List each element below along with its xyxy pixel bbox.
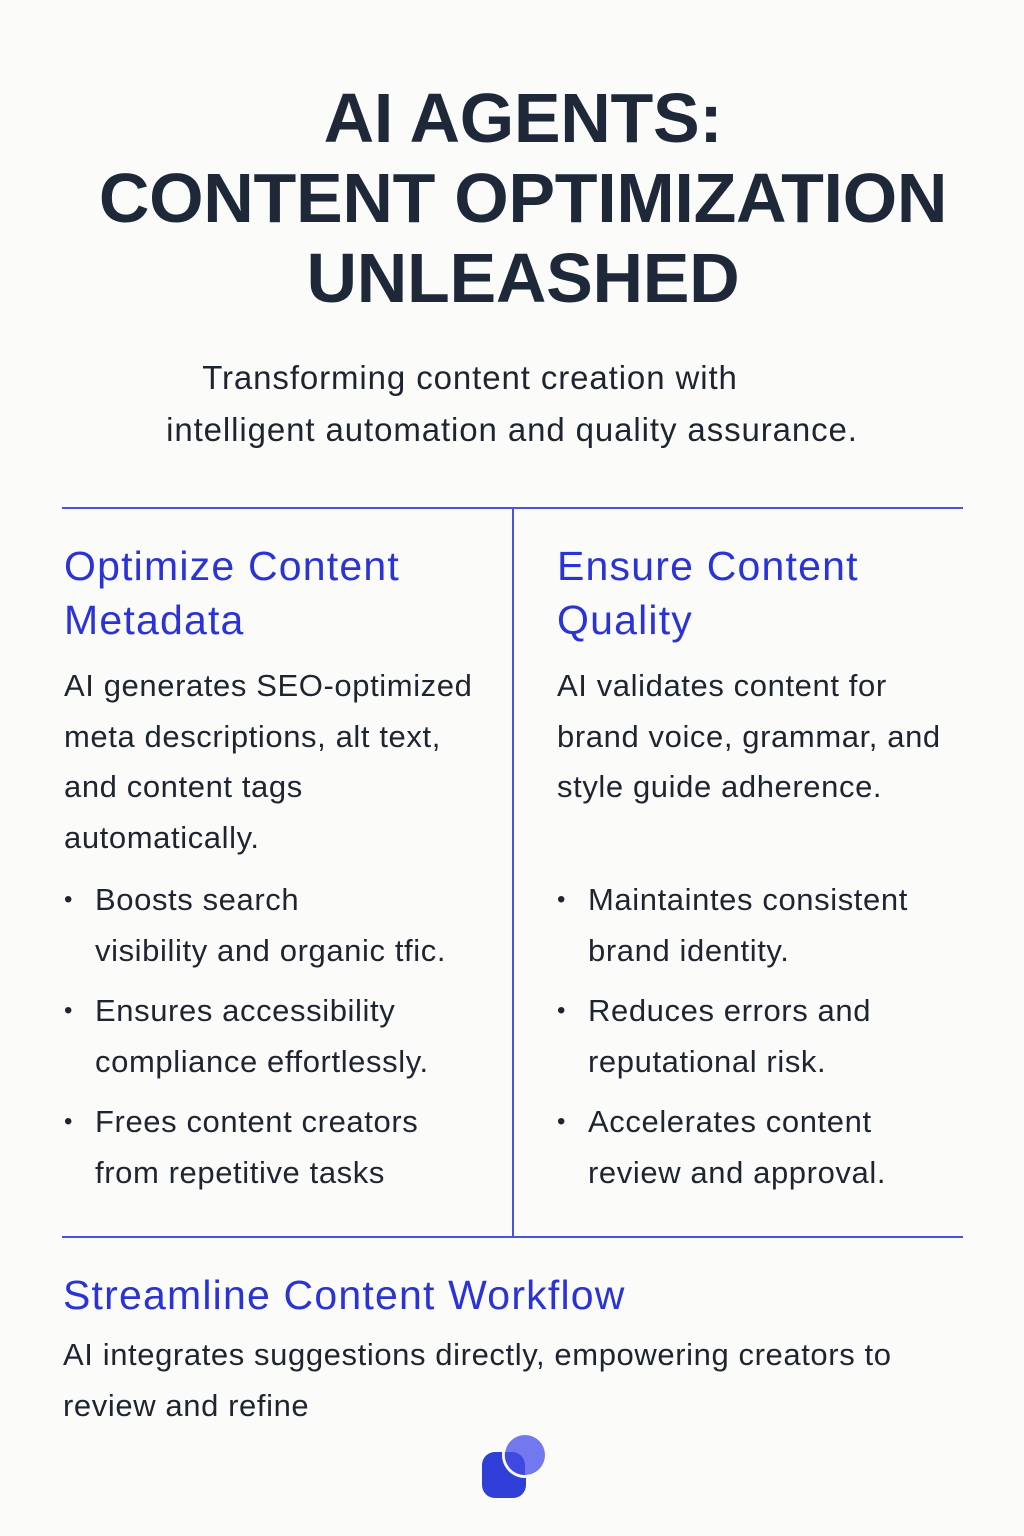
body: optimize: and content tags — [64, 769, 303, 804]
heading: optimize: Optimize Content — [64, 543, 400, 589]
body: quality: AI validates content for — [557, 668, 887, 703]
body: quality: style guide adherence. — [557, 769, 882, 804]
title: CONTENT OPTIMIZATION — [99, 159, 947, 237]
body: quality: brand voice, grammar, and — [557, 718, 941, 754]
body: workflow: review and refine — [63, 1388, 309, 1422]
heading: quality: Quality — [557, 597, 693, 643]
bullets: optimize: Ensures accessibility — [95, 993, 395, 1028]
bullets: quality: Maintaintes consistent — [588, 882, 908, 917]
body: quality — [557, 668, 941, 804]
heading: optimize — [64, 543, 400, 643]
heading: workflow: Streamline Content Workflow — [63, 1272, 626, 1318]
bullets: optimize — [64, 882, 446, 1190]
icon: logo — [482, 1435, 545, 1498]
title: UNLEASHED — [307, 239, 739, 317]
bullets: optimize: Boosts search — [95, 882, 299, 917]
bullets: quality — [558, 882, 908, 1190]
subtitle: Transforming content creation with — [202, 359, 738, 396]
bullets: quality: brand identity. — [588, 932, 789, 968]
bullets: optimize: compliance effortlessly. — [95, 1044, 429, 1078]
bullets: optimize: from repetitive tasks — [95, 1154, 385, 1190]
bullets: quality: reputational risk. — [588, 1044, 826, 1078]
body: workflow: AI integrates suggestions directly, empowering creators to — [63, 1337, 892, 1372]
heading: quality — [557, 543, 859, 643]
body: optimize: meta descriptions, alt text, — [64, 718, 441, 754]
panel: workflow — [63, 1272, 892, 1422]
title: AI AGENTS: — [324, 79, 722, 157]
body: optimize: automatically. — [64, 820, 260, 854]
title — [99, 79, 947, 317]
body: optimize: AI generates SEO-optimized — [64, 668, 472, 703]
subtitle: intelligent automation and quality assurance. — [166, 411, 858, 448]
bullets: quality: Accelerates content — [588, 1104, 872, 1139]
bullets: quality: review and approval. — [588, 1154, 886, 1190]
bullets: optimize: Frees content creators — [95, 1104, 418, 1139]
bullets: quality: Reduces errors and — [588, 993, 871, 1028]
heading: optimize: Metadata — [64, 597, 245, 643]
body: optimize — [64, 668, 472, 854]
panel: optimize metadata — [64, 543, 472, 1190]
body: workflow — [63, 1337, 892, 1422]
bullets: optimize: visibility and organic tfic. — [95, 932, 446, 968]
subtitle — [166, 359, 858, 448]
panel: ensure quality — [557, 543, 941, 1190]
heading: quality: Ensure Content — [557, 543, 859, 589]
